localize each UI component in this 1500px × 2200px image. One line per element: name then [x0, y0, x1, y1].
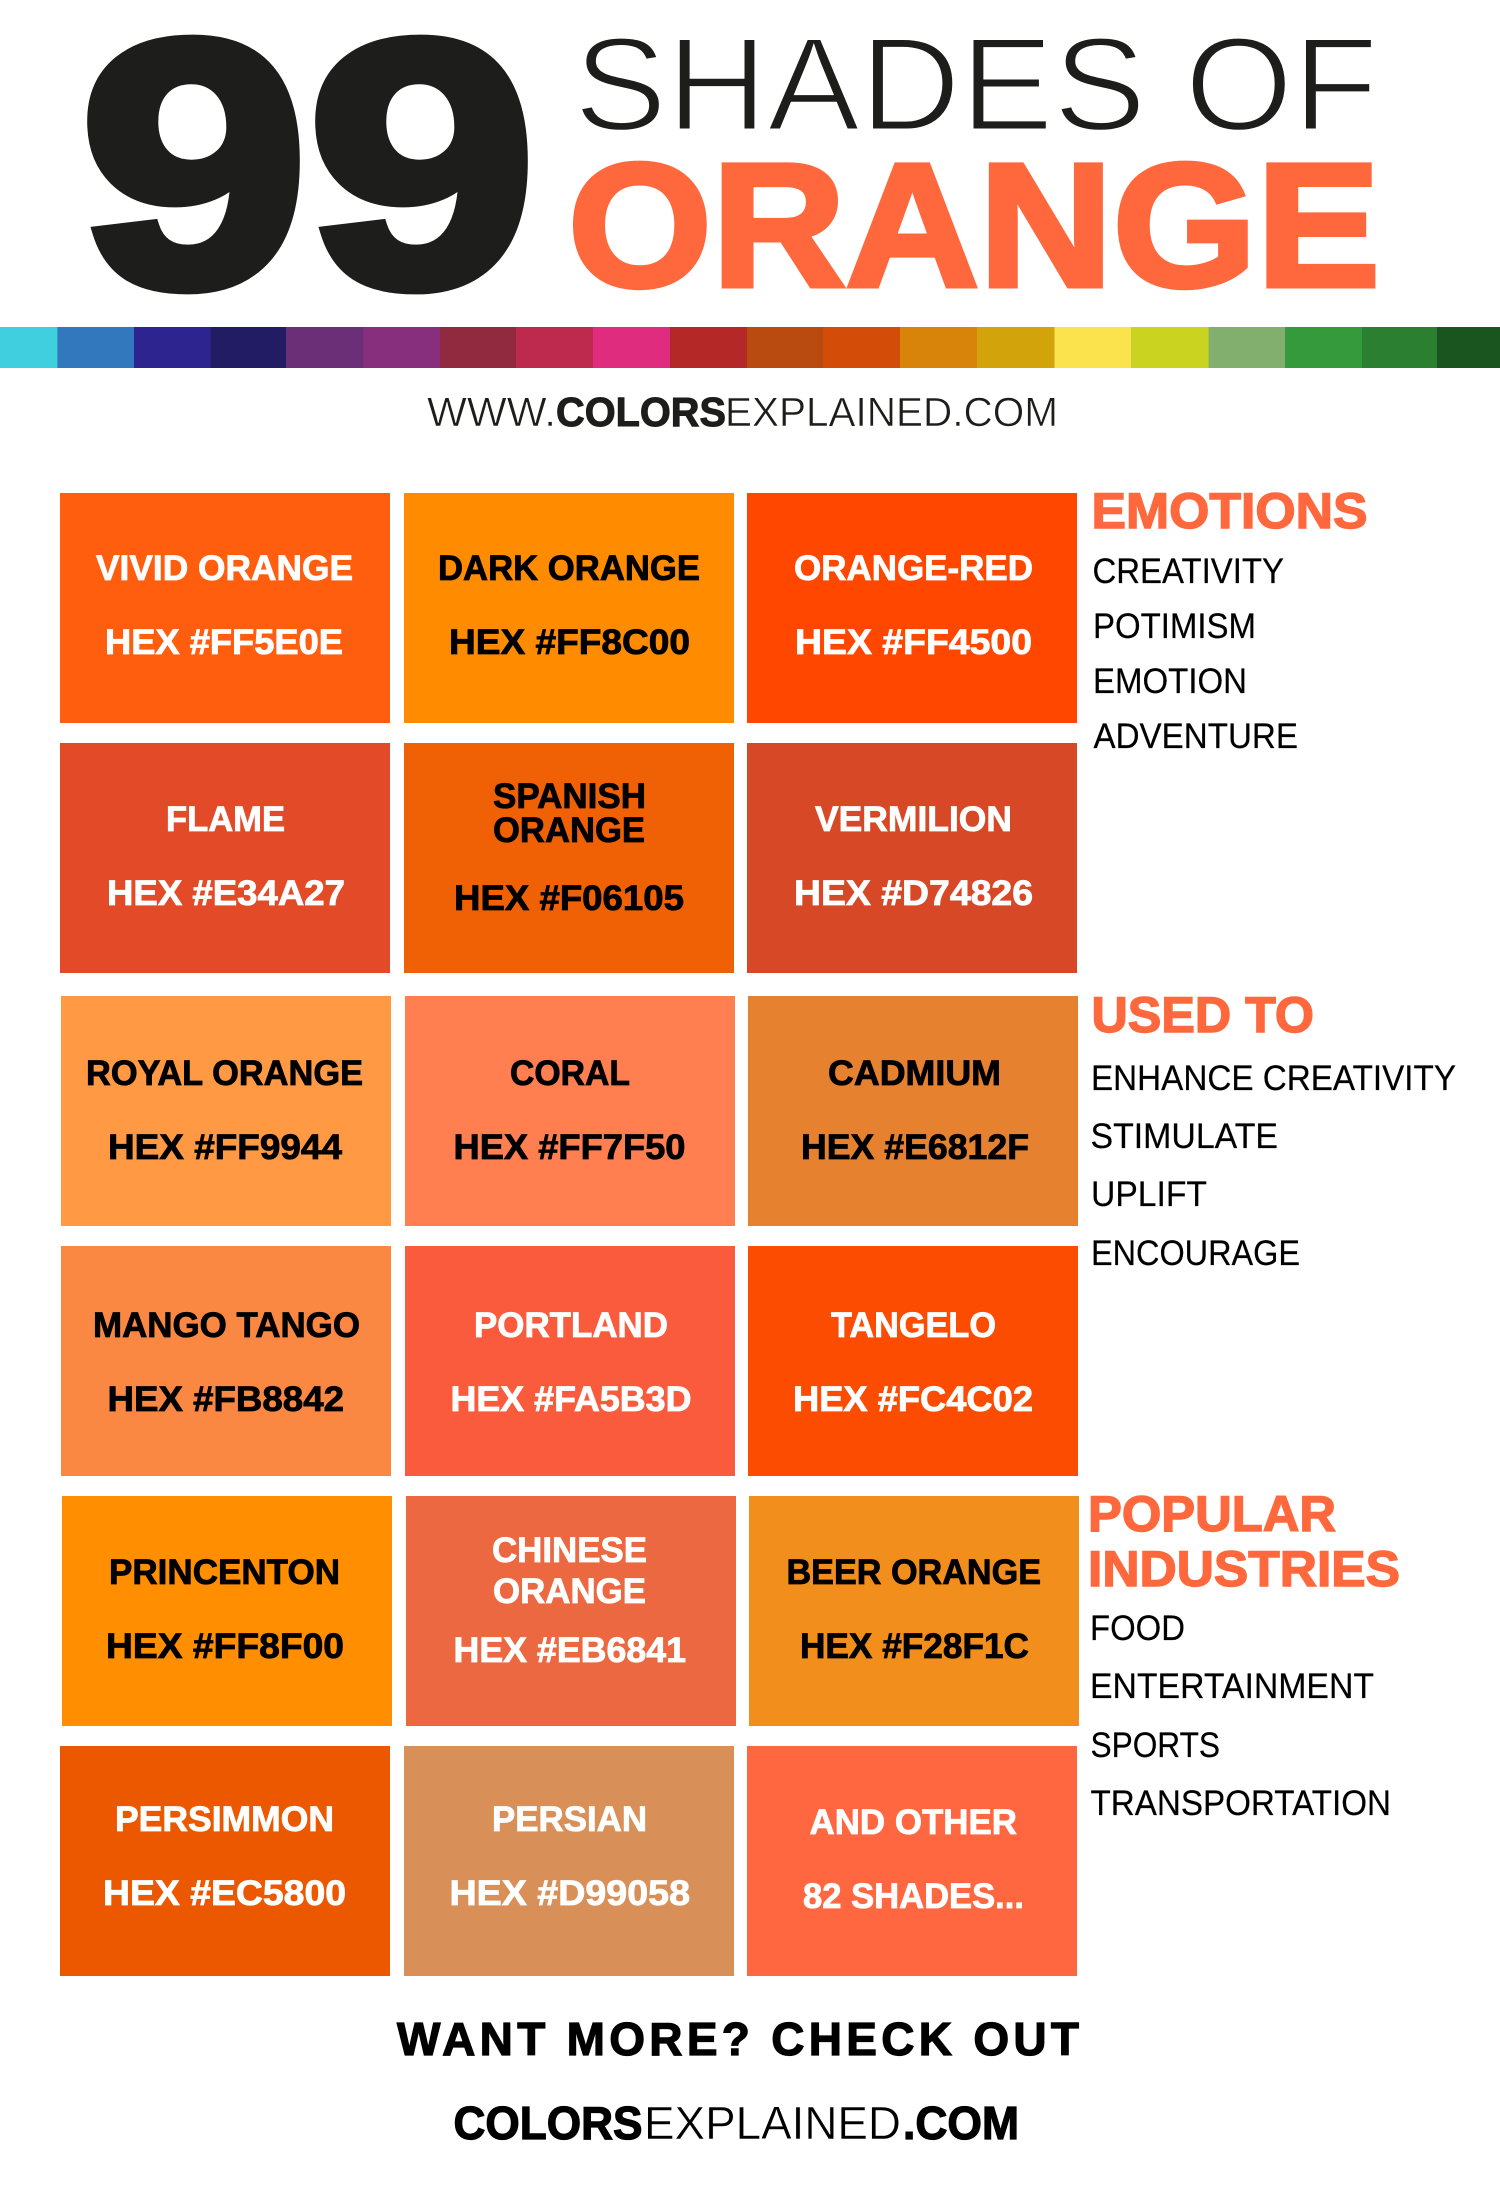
- swatch: cadmium: HEX #E6812F: [801, 1128, 1029, 1167]
- swatch: princenton: PRINCENTON: [109, 1553, 340, 1592]
- swatch: vermilion: VERMILION: [815, 800, 1012, 839]
- swatch: persimmon: PERSIMMON: [115, 1800, 334, 1839]
- swatch: cadmium: [748, 996, 1078, 1226]
- emotions list: EMOTION: [1093, 662, 1247, 701]
- swatch: coral: HEX #FF7F50: [454, 1128, 686, 1167]
- swatch: princenton: HEX #FF8F00: [106, 1627, 344, 1666]
- industries list: FOOD: [1090, 1609, 1185, 1648]
- swatch: persimmon: [60, 1746, 390, 1976]
- emotions list: CREATIVITY: [1092, 552, 1284, 591]
- swatch: chinese orange: CHINESE: [492, 1531, 647, 1570]
- swatch: persian: PERSIAN: [492, 1800, 647, 1839]
- swatch: royal orange: [61, 996, 391, 1226]
- swatch: orange-red: HEX #FF4500: [795, 623, 1032, 662]
- swatch: portland: [405, 1246, 735, 1476]
- swatch: mango tango: HEX #FB8842: [108, 1380, 344, 1419]
- swatch: persian: [404, 1746, 734, 1976]
- swatch: chinese orange: ORANGE: [493, 1572, 646, 1611]
- swatch: cadmium: CADMIUM: [828, 1054, 1001, 1093]
- swatch: vermilion: HEX #D74826: [794, 874, 1033, 913]
- swatch: portland: HEX #FA5B3D: [450, 1380, 692, 1419]
- swatch: spanish orange: [404, 743, 734, 973]
- swatch: beer orange: HEX #F28F1C: [800, 1627, 1029, 1666]
- swatch: and other 82 shades: [747, 1746, 1077, 1976]
- swatch: flame: FLAME: [166, 800, 285, 839]
- title: 99 shades of orange: [80, 0, 1380, 360]
- panel: emotions: [1092, 483, 1368, 756]
- industries list: SPORTS: [1090, 1726, 1220, 1765]
- footer website: COLORS: [454, 2097, 642, 2149]
- swatch: portland: PORTLAND: [474, 1306, 668, 1345]
- swatch: beer orange: [749, 1496, 1079, 1726]
- heading: emotions: EMOTIONS: [1092, 483, 1368, 539]
- swatch: princenton: [62, 1496, 392, 1726]
- industries list: TRANSPORTATION: [1090, 1784, 1391, 1823]
- used to list: STIMULATE: [1090, 1117, 1278, 1156]
- swatch: chinese orange: [406, 1496, 736, 1726]
- heading: popular industries: INDUSTRIES: [1088, 1541, 1400, 1597]
- panel: used to: [1090, 987, 1456, 1273]
- heading: popular industries: [1088, 1486, 1400, 1597]
- swatch: chinese orange: HEX #EB6841: [454, 1631, 686, 1670]
- swatch: orange-red: [747, 493, 1077, 723]
- heading: orange: ORANGE: [568, 128, 1380, 324]
- panel: popular industries: [1088, 1486, 1400, 1823]
- footer call to action: WANT MORE? CHECK OUT: [397, 2013, 1079, 2065]
- swatch: tangelo: TANGELO: [831, 1306, 996, 1345]
- swatch: and other 82 shades: AND OTHER: [810, 1803, 1017, 1842]
- swatch: coral: CORAL: [510, 1054, 630, 1093]
- swatch: flame: HEX #E34A27: [107, 874, 345, 913]
- swatch: flame: [60, 743, 390, 973]
- swatch: persimmon: HEX #EC5800: [103, 1874, 346, 1913]
- used to list: [1090, 1059, 1456, 1273]
- swatch: coral: [405, 996, 735, 1226]
- heading: popular industries: POPULAR: [1088, 1486, 1336, 1542]
- swatch: mango tango: MANGO TANGO: [93, 1306, 360, 1345]
- swatch: persian: HEX #D99058: [450, 1874, 690, 1913]
- swatch: beer orange: BEER ORANGE: [786, 1553, 1041, 1592]
- footer website: .COM: [903, 2097, 1019, 2149]
- website url: COLORS: [556, 389, 726, 435]
- swatch: royal orange: ROYAL ORANGE: [86, 1054, 363, 1093]
- used to list: ENCOURAGE: [1091, 1234, 1300, 1273]
- swatch: tangelo: HEX #FC4C02: [793, 1380, 1033, 1419]
- emotions list: [1092, 552, 1298, 756]
- swatch: dark orange: HEX #FF8C00: [449, 623, 690, 662]
- swatch: tangelo: [748, 1246, 1078, 1476]
- rainbow colour strip: [0, 327, 1500, 368]
- swatch: orange-red: ORANGE-RED: [794, 549, 1033, 588]
- emotions list: POTIMISM: [1093, 607, 1256, 646]
- swatch: vivid orange: [60, 493, 390, 723]
- industries list: ENTERTAINMENT: [1090, 1667, 1374, 1706]
- swatch: and other 82 shades: 82 SHADES...: [803, 1877, 1024, 1916]
- website url: WWW.: [427, 389, 556, 435]
- swatch: vivid orange: VIVID ORANGE: [96, 549, 353, 588]
- swatch: dark orange: [404, 493, 734, 723]
- heading: used to: USED TO: [1092, 987, 1314, 1043]
- swatch: mango tango: [61, 1246, 391, 1476]
- swatch: dark orange: DARK ORANGE: [438, 549, 700, 588]
- industries list: [1090, 1609, 1391, 1823]
- website url: EXPLAINED.COM: [725, 389, 1058, 435]
- footer website: EXPLAINED: [644, 2097, 901, 2149]
- used to list: ENHANCE CREATIVITY: [1091, 1059, 1456, 1098]
- swatch: vermilion: [747, 743, 1077, 973]
- swatch: vivid orange: HEX #FF5E0E: [105, 623, 343, 662]
- swatch: royal orange: HEX #FF9944: [108, 1128, 343, 1167]
- swatch: spanish orange: HEX #F06105: [454, 879, 684, 918]
- swatch: spanish orange: ORANGE: [493, 811, 645, 850]
- emotions list: ADVENTURE: [1094, 717, 1298, 756]
- footer website: [454, 2097, 1019, 2149]
- heading: shades of: SHADES OF: [574, 11, 1378, 159]
- used to list: UPLIFT: [1091, 1175, 1207, 1214]
- website url: [427, 389, 1058, 435]
- swatch: spanish orange: SPANISH: [493, 777, 646, 816]
